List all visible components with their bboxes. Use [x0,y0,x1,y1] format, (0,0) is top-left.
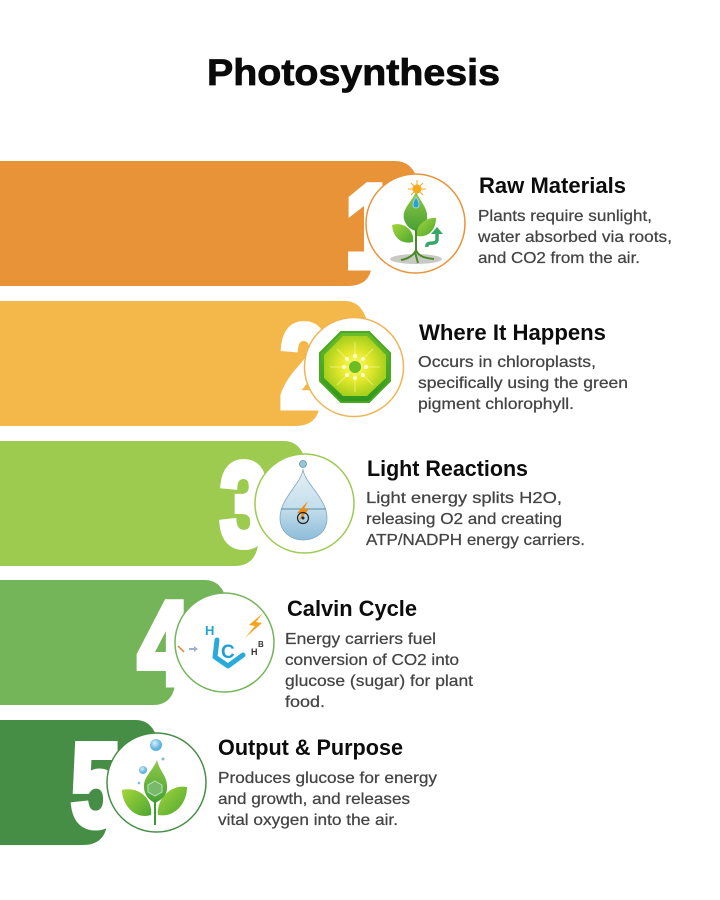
icon: chloroplast [320,332,390,402]
circle 3 [255,454,354,553]
icon: water drop [280,460,327,540]
body 2: specifically using the green [418,375,628,392]
heading 4: Calvin Cycle [287,596,417,621]
circle 5 [107,733,206,832]
body 5: Produces glucose for energy [218,770,437,787]
body 4: Energy carriers fuel [285,631,436,648]
icon: sprouting plant [390,180,443,264]
body 5: vital oxygen into the air. [218,812,398,829]
panel: output and purpose [0,720,437,852]
body 2 [418,354,628,413]
icon: carbon molecule: B [258,640,264,649]
panel: raw materials [0,161,672,293]
icon: carbon molecule: H [205,623,214,638]
body 2: Occurs in chloroplasts, [418,354,596,371]
bar 1 [0,161,417,286]
circle 1 [366,174,465,273]
icon: carbon molecule: H [251,647,258,657]
number 4: 4 [138,578,190,710]
body 3: ATP/NADPH energy carriers. [366,532,585,549]
panel: light reactions [0,439,585,571]
number 3: 3 [220,439,268,571]
bar 4 [0,580,225,705]
body 5: and growth, and releases [218,791,410,808]
body 3: Light energy splits H2O, [366,490,562,507]
body 1: Plants require sunlight, [478,208,652,225]
body 1: and CO2 from the air. [478,250,640,267]
body 1: water absorbed via roots, [477,229,672,246]
circle 4 [175,593,274,692]
bar 5 [0,720,156,845]
icon: leaf and oxygen bubbles [122,739,187,825]
icon: carbon molecule [178,613,264,666]
number 1: 1 [345,161,397,293]
number 2: 2 [280,301,328,433]
body 3 [366,490,585,549]
panel: calvin cycle [0,578,474,711]
heading 1: Raw Materials [479,173,626,198]
heading 5: Output & Purpose [218,735,403,760]
heading 2: Where It Happens [419,320,606,345]
bar 3 [0,441,304,566]
body 3: releasing O2 and creating [366,511,562,528]
body 5 [218,770,437,829]
body 4: food. [285,694,325,711]
bar 2 [0,301,366,426]
body 4: conversion of CO2 into [285,652,459,669]
body 2: pigment chlorophyll. [418,396,574,413]
title: Photosynthesis [207,52,500,93]
panel: where it happens [0,301,628,433]
icon: carbon molecule: C [221,642,235,663]
body 4 [285,631,474,711]
number 5: 5 [71,720,121,852]
body 1 [477,208,672,267]
circle 2 [304,318,404,416]
body 4: glucose (sugar) for plant [285,673,474,690]
heading 3: Light Reactions [367,456,528,481]
